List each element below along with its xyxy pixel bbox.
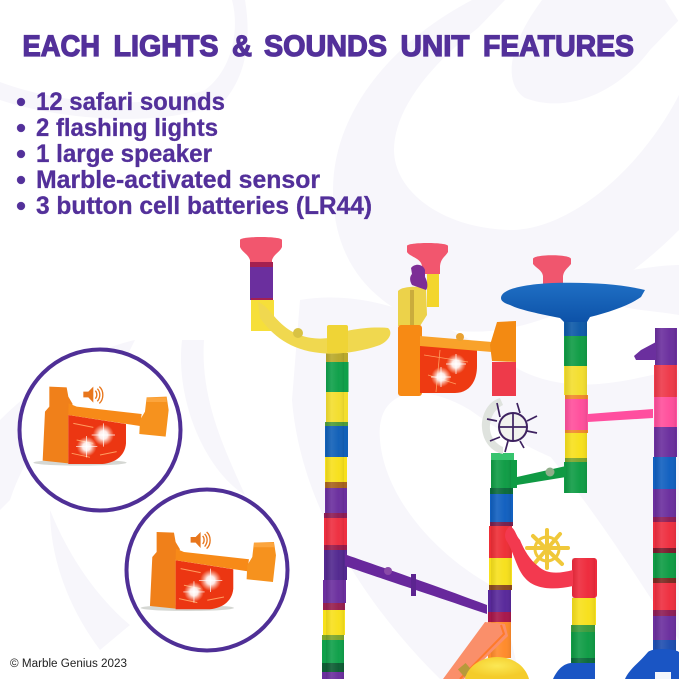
title xyxy=(22,30,634,63)
funnel: left xyxy=(240,237,282,331)
tower column: far right xyxy=(634,328,677,654)
clear wheel with dark spokes xyxy=(482,398,537,454)
callout circle: top unit xyxy=(20,350,180,510)
title: UNIT xyxy=(400,30,470,63)
tower column: lower right xyxy=(571,558,597,679)
orange slide and yellow sphere xyxy=(443,622,529,679)
icon: speaker xyxy=(83,387,103,403)
yellow clear cup and purple figure xyxy=(398,265,427,326)
callout circle: bottom unit xyxy=(126,490,288,650)
funnel: centre xyxy=(407,243,448,307)
blue base pieces xyxy=(553,649,679,679)
red curved ramp and yellow wheel xyxy=(505,526,573,588)
purple sloped beam xyxy=(345,549,487,614)
yellow curved ramp and bowl xyxy=(258,302,390,354)
pink connector beam xyxy=(588,409,653,422)
bullet: 2 flashing lights: 2 flashing lights xyxy=(36,114,218,142)
bullet: 12 safari sounds: 12 safari sounds xyxy=(36,88,225,116)
title: & xyxy=(232,30,252,63)
tower column: right of dish xyxy=(564,320,588,493)
green connector beam with marble xyxy=(517,466,566,485)
glint lights xyxy=(431,354,466,387)
bullet: 1 large speaker: 1 large speaker xyxy=(36,140,212,168)
glint lights xyxy=(76,423,115,457)
tower column: centre xyxy=(488,362,517,658)
glint lights xyxy=(183,569,222,603)
icon: speaker xyxy=(191,532,210,549)
marble run towers xyxy=(240,237,679,679)
bullet: marble-activated sensor: Marble-activated sensor xyxy=(36,166,320,194)
title: SOUNDS xyxy=(264,30,387,63)
copyright: © Marble Genius 2023 xyxy=(10,658,127,670)
tower column: left xyxy=(322,353,348,679)
feature list xyxy=(17,88,372,220)
funnel: right and blue dish xyxy=(501,255,645,322)
title: LIGHTS xyxy=(114,30,218,63)
bullet: 3 button cell batteries: 3 button cell batteries (LR44) xyxy=(36,192,372,220)
title: EACH xyxy=(22,30,100,63)
unit illustration xyxy=(33,387,169,466)
unit illustration xyxy=(141,532,276,611)
title: FEATURES xyxy=(483,30,634,63)
lights and sounds unit on tower xyxy=(398,321,516,396)
